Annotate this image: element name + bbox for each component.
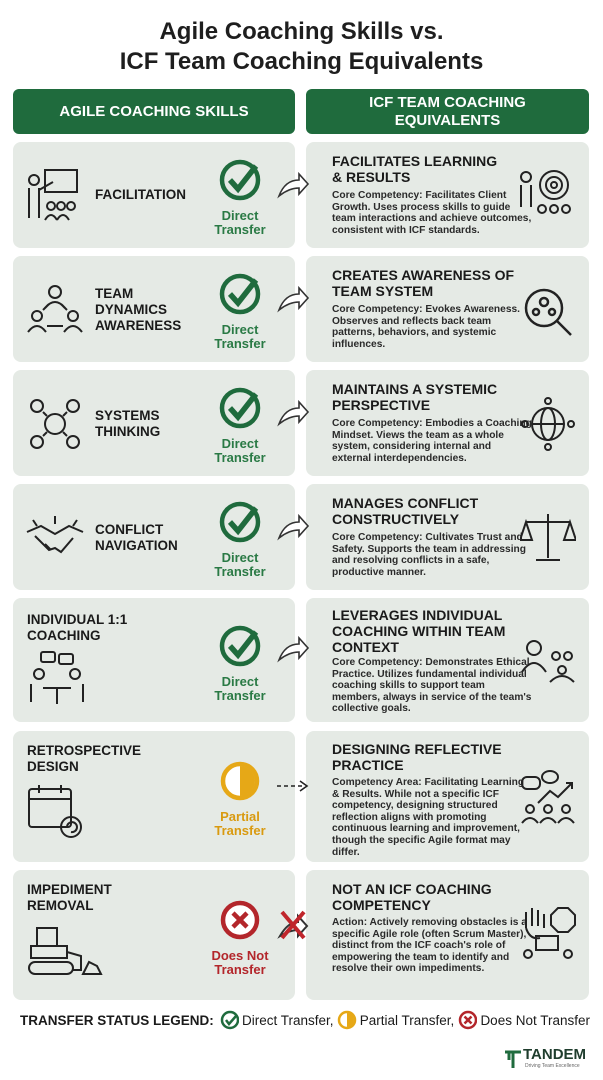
status: partial <box>214 762 266 838</box>
status: direct: Direct <box>222 322 258 337</box>
row 4 right panel <box>306 484 589 590</box>
title <box>332 741 502 773</box>
title: CONSTRUCTIVELY <box>332 511 459 527</box>
label <box>27 612 127 643</box>
row 1 left panel <box>13 142 295 248</box>
logo: tandem: TANDEM <box>523 1046 586 1063</box>
row 7 right panel <box>306 870 589 1000</box>
status: direct <box>214 274 266 351</box>
icon: bulldozer <box>28 927 103 975</box>
title: MAINTAINS A SYSTEMIC <box>332 381 497 397</box>
arrows between panels <box>277 172 309 940</box>
title: PERSPECTIVE <box>332 397 430 413</box>
description: Action: Actively removing obstacles is a specific Agile role (often Scrum Master), distinct from the ICF coach's role of empowering the team to identify and resolve their own impediments. <box>332 917 527 974</box>
status: direct: Direct <box>222 208 258 223</box>
arrow 3 <box>277 400 309 426</box>
label <box>95 286 181 333</box>
label: RETROSPECTIVE <box>27 743 141 758</box>
label: INDIVIDUAL 1:1 <box>27 612 127 627</box>
header: agile coaching skills: AGILE COACHING SKILLS <box>59 102 249 120</box>
arrow 6 dashed <box>276 778 310 794</box>
status: direct <box>214 160 266 237</box>
status: direct: Direct <box>222 674 258 689</box>
label: TEAM <box>95 286 133 301</box>
description: Core Competency: Facilitates Client Growth. Uses process skills to guide team interactions and achieve outcomes, consistent with ICF standards. <box>332 190 531 236</box>
label <box>27 882 112 913</box>
title: MANAGES CONFLICT <box>332 495 478 511</box>
row 5 right panel <box>306 598 589 722</box>
title <box>332 495 478 527</box>
status: direct <box>214 626 266 703</box>
row 6 right panel <box>306 731 589 862</box>
label: THINKING <box>95 424 160 439</box>
label <box>95 522 178 553</box>
status: direct: Transfer <box>214 336 266 351</box>
title: COACHING WITHIN TEAM <box>332 623 505 639</box>
status: direct: Direct <box>222 550 258 565</box>
icon: stop hand <box>523 907 576 959</box>
title <box>332 881 492 913</box>
arrow 1 <box>277 172 309 198</box>
label: DYNAMICS <box>95 302 167 317</box>
title: & RESULTS <box>332 169 410 185</box>
status: direct <box>214 502 266 579</box>
icon: target <box>520 170 571 214</box>
label: CONFLICT <box>95 522 163 537</box>
label: FACILITATION <box>95 187 186 202</box>
label: AWARENESS <box>95 318 181 333</box>
title <box>332 381 497 413</box>
icon: facilitator <box>28 169 78 220</box>
description: Core Competency: Embodies a Coaching Mindset. Views the team as a whole system, considering internal and external interdependencies. <box>332 418 532 464</box>
row 3 left panel <box>13 370 295 476</box>
icon: calendar <box>28 785 82 838</box>
status: partial: Transfer <box>214 823 266 838</box>
header: icf equivalents: ICF TEAM COACHING <box>369 94 526 110</box>
title: CONTEXT <box>332 639 399 655</box>
legend: Does Not Transfer <box>480 1012 590 1028</box>
icon: people <box>521 640 575 683</box>
label: DESIGN <box>27 759 79 774</box>
title <box>332 153 497 185</box>
title: LEVERAGES INDIVIDUAL <box>332 607 502 623</box>
header: icf equivalents: EQUIVALENTS <box>395 112 500 128</box>
description: Competency Area: Facilitating Learning & Results. While not a specific ICF competency, designing structured reflection aligns with promoting continuous learning and improvement, though the specific Agile format may differ. <box>332 777 524 858</box>
status: partial: Partial <box>220 809 260 824</box>
title: NOT AN ICF COACHING <box>332 881 492 897</box>
status: direct: Transfer <box>214 564 266 579</box>
icon: gears <box>30 399 80 449</box>
icon: handshake <box>26 516 84 554</box>
arrow 7 crossed <box>276 908 310 942</box>
description: Core Competency: Cultivates Trust and Safety. Supports the team in addressing and resolving conflicts in a safe, productive manner. <box>332 532 526 578</box>
row 3 right panel <box>306 370 589 476</box>
icon: magnifier <box>524 288 572 336</box>
status: does not transfer: Does Not <box>211 948 269 963</box>
label: REMOVAL <box>27 898 94 913</box>
icon: team dynamics <box>27 285 83 333</box>
description: Core Competency: Evokes Awareness. Observes and reflects back team patterns, behaviors, and systemic influences. <box>332 304 520 350</box>
title: TEAM SYSTEM <box>332 283 433 299</box>
label <box>95 408 160 439</box>
icon: globe network <box>521 397 575 451</box>
title: PRACTICE <box>332 757 404 773</box>
title: COMPETENCY <box>332 897 431 913</box>
logo: tandem: Driving Team Excellence <box>525 1063 580 1069</box>
status: does not transfer <box>211 900 269 977</box>
row 6 left panel <box>13 731 295 862</box>
icon: scales <box>520 514 576 561</box>
status: direct: Transfer <box>214 688 266 703</box>
label: NAVIGATION <box>95 538 178 553</box>
arrow 4 <box>277 514 309 540</box>
status: direct: Transfer <box>214 222 266 237</box>
status: direct: Direct <box>222 436 258 451</box>
title <box>120 18 483 75</box>
row 7 left panel <box>13 870 295 1000</box>
icon: reflection <box>521 770 575 824</box>
row 1 right panel <box>306 142 589 248</box>
description: Core Competency: Demonstrates Ethical Practice. Utilizes fundamental individual coaching skills to support team members, always in service of the team's collective goals. <box>332 657 531 714</box>
label <box>27 743 141 774</box>
arrow 2 <box>277 286 309 312</box>
label: COACHING <box>27 628 100 643</box>
legend <box>20 1009 590 1031</box>
row 2 right panel <box>306 256 589 362</box>
row 5 left panel <box>13 598 295 722</box>
status: direct: Transfer <box>214 450 266 465</box>
label: IMPEDIMENT <box>27 882 112 897</box>
label: SYSTEMS <box>95 408 160 423</box>
title: ICF Team Coaching Equivalents <box>120 48 483 75</box>
title: DESIGNING REFLECTIVE <box>332 741 502 757</box>
title: Agile Coaching Skills vs. <box>159 18 444 45</box>
arrow 5 <box>276 634 310 664</box>
title <box>332 607 505 655</box>
icon: 1:1 meeting <box>30 651 84 704</box>
row 4 left panel <box>13 484 295 590</box>
title <box>332 267 514 299</box>
legend: Direct Transfer, <box>242 1012 333 1028</box>
title: CREATES AWARENESS OF <box>332 267 514 283</box>
row 2 left panel <box>13 256 295 362</box>
status: does not transfer: Transfer <box>214 962 266 977</box>
legend: TRANSFER STATUS LEGEND: <box>20 1012 214 1028</box>
logo: tandem <box>503 1047 593 1071</box>
title: FACILITATES LEARNING <box>332 153 497 169</box>
header: agile coaching skills <box>13 89 295 134</box>
header: icf equivalents <box>306 89 589 134</box>
status: direct <box>214 388 266 465</box>
legend: Partial Transfer, <box>360 1012 454 1028</box>
